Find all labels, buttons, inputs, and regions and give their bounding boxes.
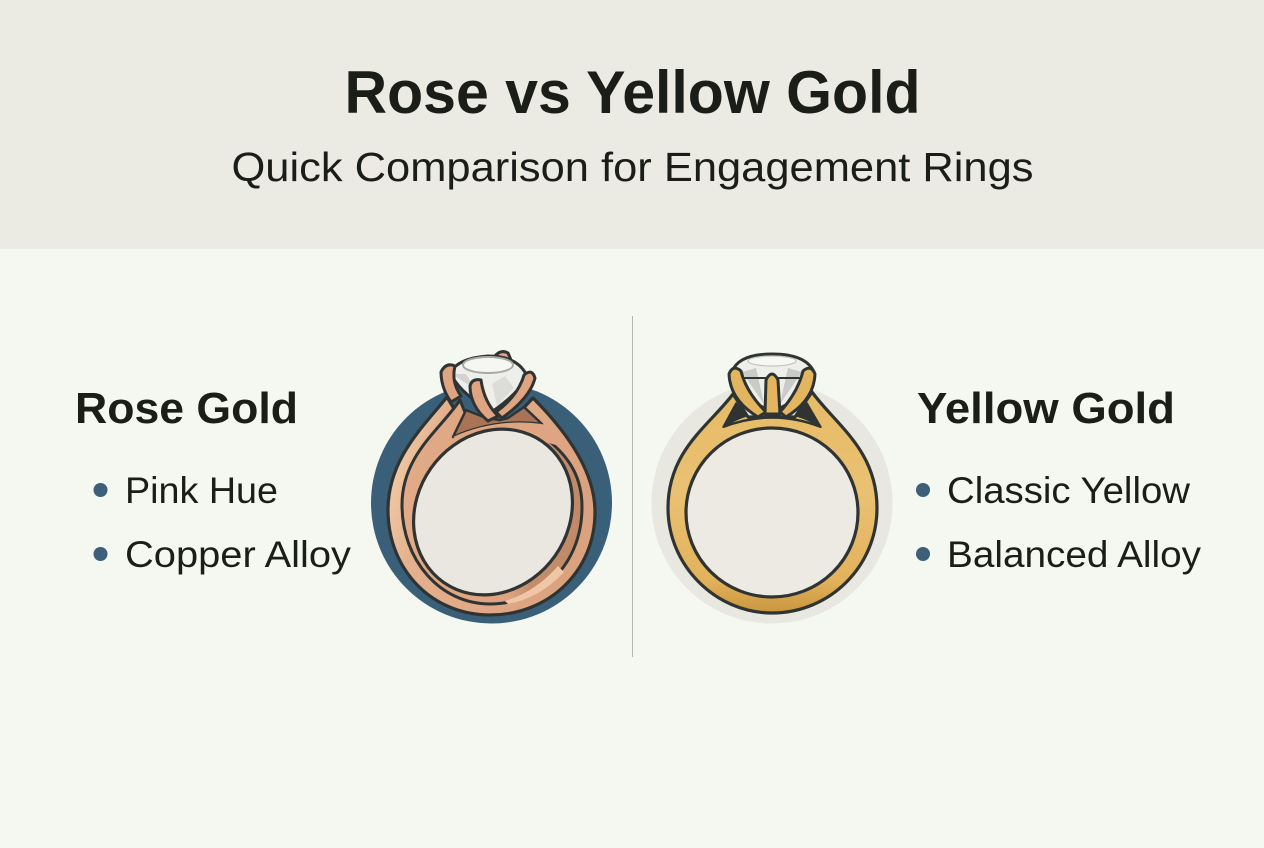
- bullet: balanced alloy: Balanced Alloy: [947, 534, 1202, 575]
- yellow ring band: [668, 392, 877, 613]
- yellow ring prongs: [729, 368, 815, 417]
- rose ring prongs: [441, 365, 535, 421]
- panel: rose gold text: [75, 384, 352, 575]
- rose ring diamond: [450, 356, 527, 411]
- rose ring shoulder gaps: [453, 407, 542, 437]
- bullet: pink hue: Pink Hue: [125, 470, 278, 511]
- rose ring backdrop circle: [371, 382, 612, 624]
- title: Rose vs Yellow Gold: [344, 59, 920, 126]
- bullet: copper alloy: Copper Alloy: [125, 534, 352, 575]
- icon: rose gold ring: [371, 352, 612, 626]
- heading: yellow gold: Yellow Gold: [917, 384, 1175, 433]
- rose ring hole: [381, 398, 605, 626]
- bullet: classic yellow: Classic Yellow: [947, 470, 1190, 511]
- rose ring inner band: [402, 400, 582, 604]
- rose ring back prong: [495, 352, 511, 360]
- rose ring top band: [453, 423, 574, 462]
- panel: yellow gold text: [916, 384, 1202, 575]
- rose ring outer band: [388, 397, 595, 615]
- centre divider: [632, 316, 633, 657]
- heading: rose gold: Rose Gold: [75, 384, 298, 433]
- yellow ring top arc: [723, 418, 821, 427]
- subtitle: Quick Comparison for Engagement Rings: [232, 144, 1034, 190]
- yellow ring diamond: [732, 354, 814, 412]
- icon: yellow gold ring: [652, 354, 892, 624]
- header band: [0, 0, 1264, 249]
- yellow ring shoulder gaps: [723, 403, 821, 427]
- yellow ring backdrop circle: [652, 382, 892, 624]
- rose ring highlight: [505, 566, 564, 604]
- yellow ring hole: [686, 428, 858, 597]
